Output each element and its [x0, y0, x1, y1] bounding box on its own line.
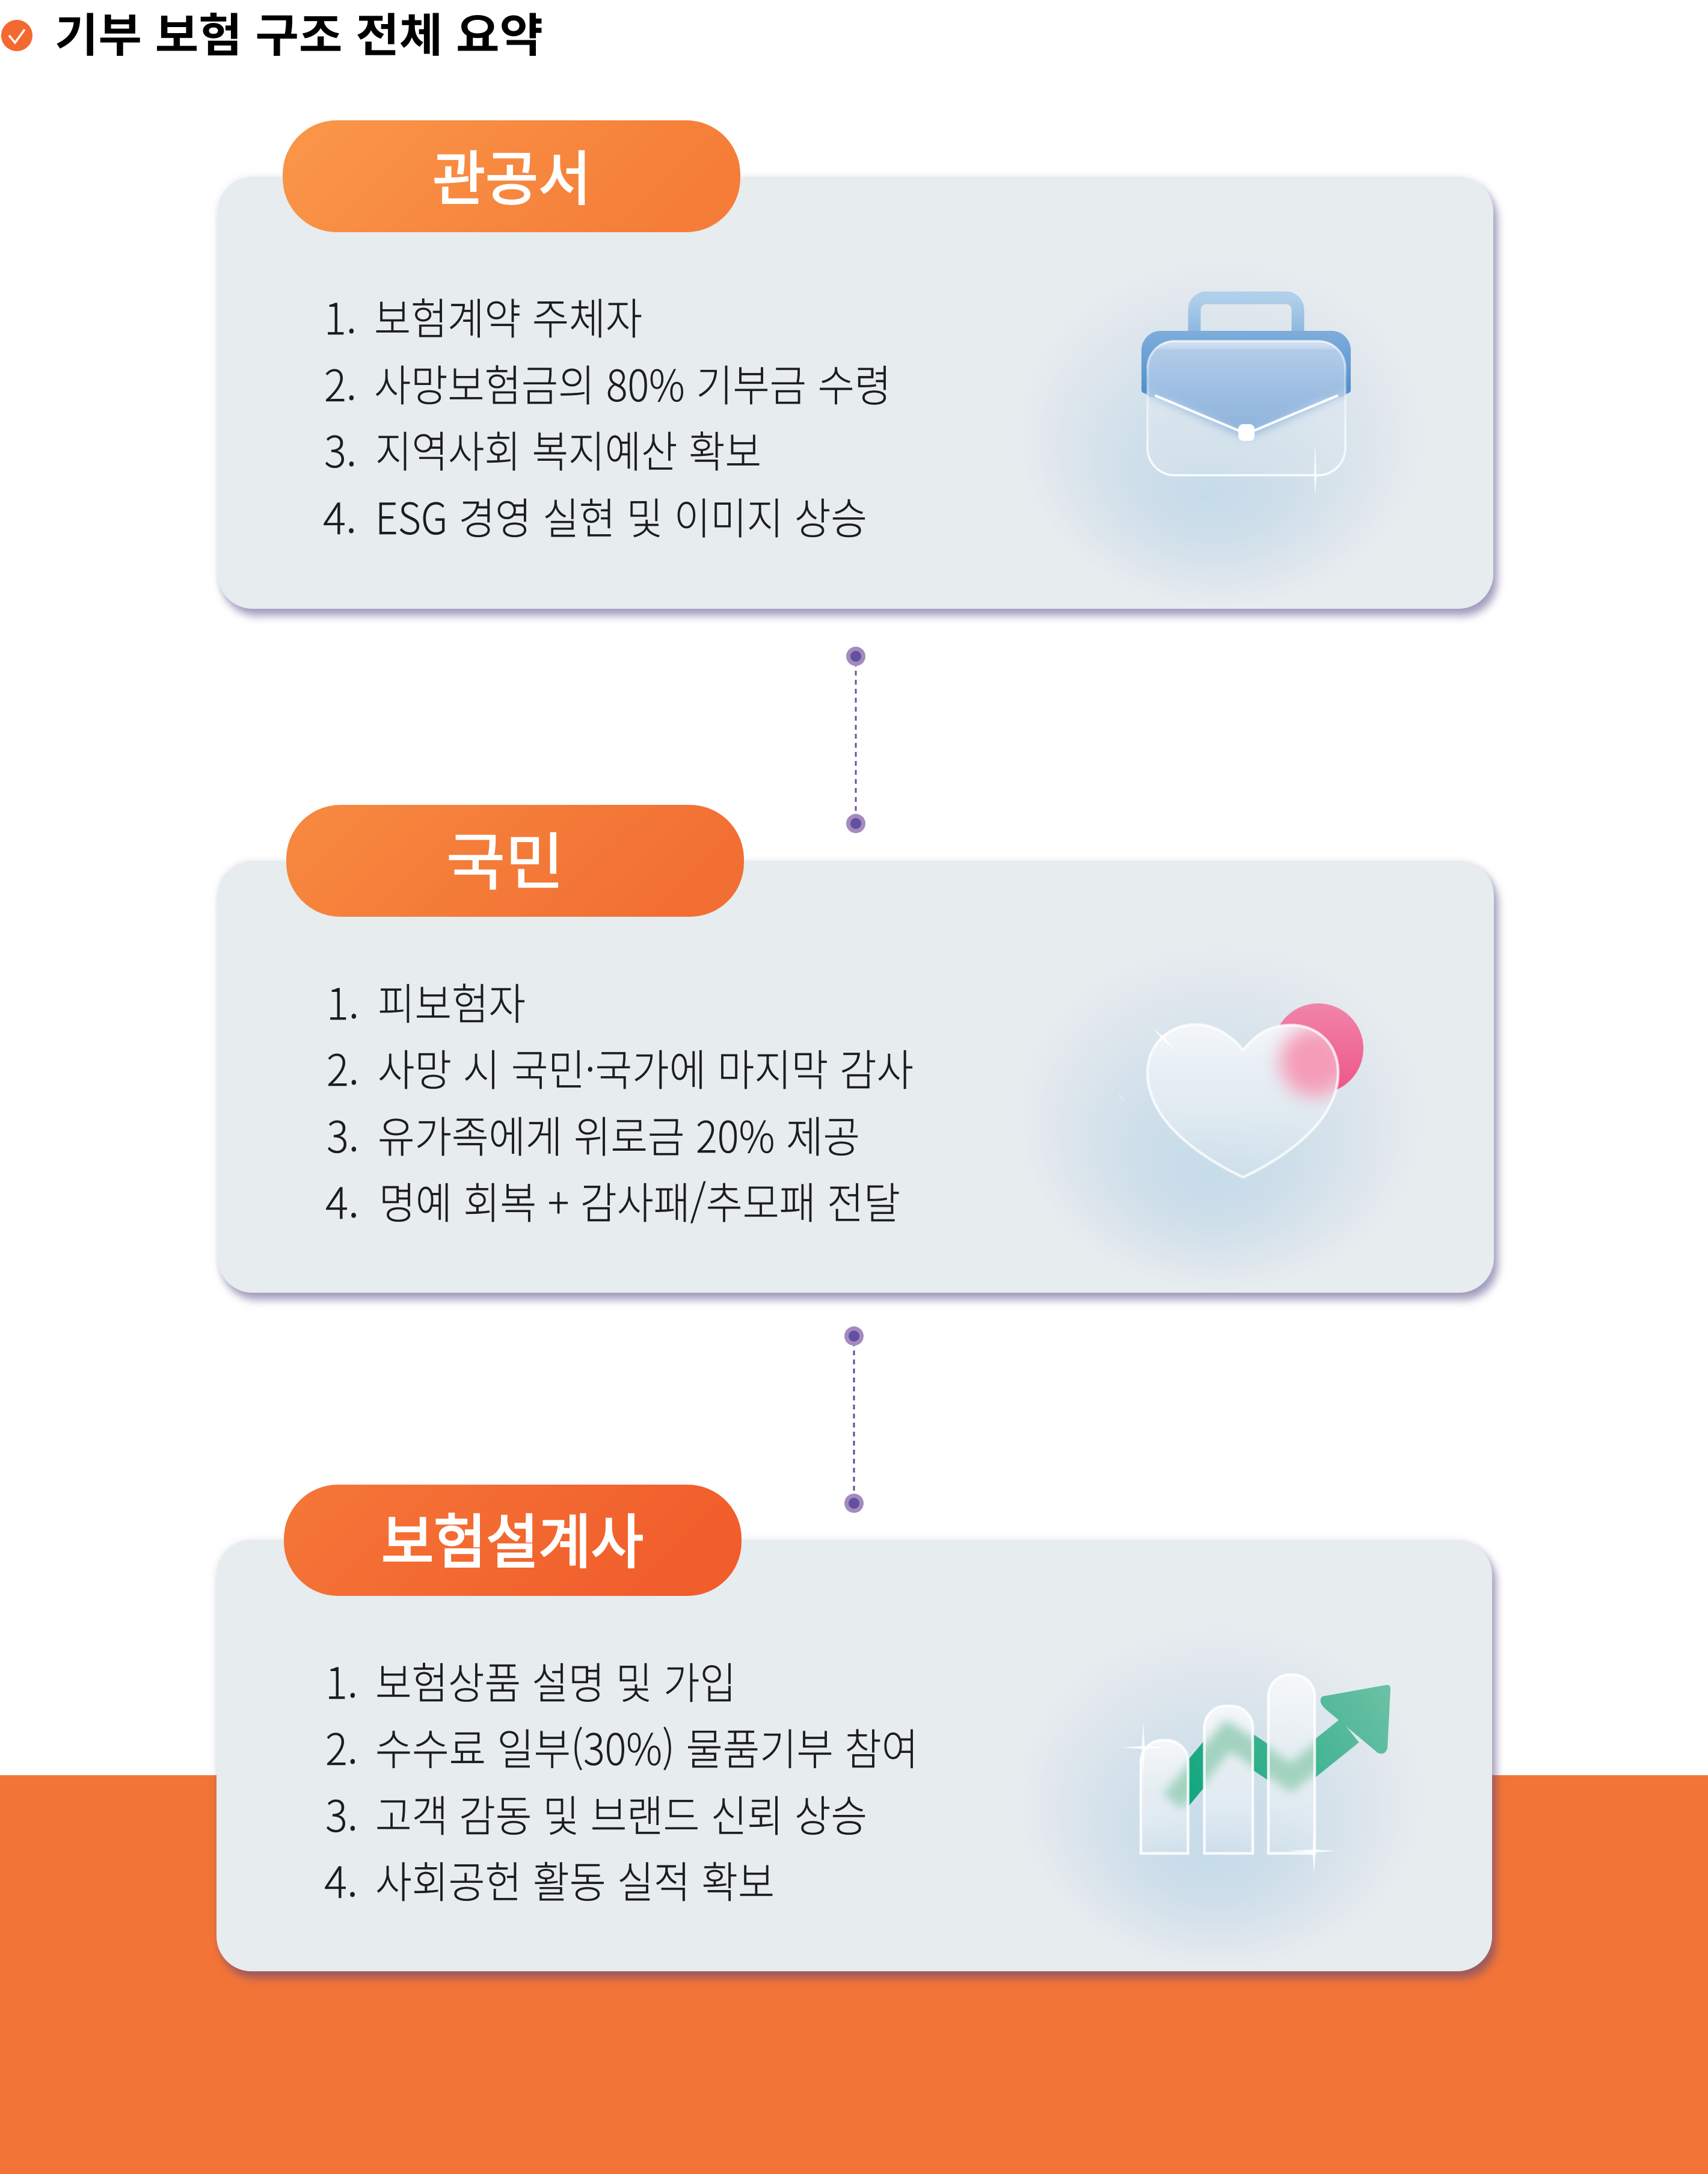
card background — [218, 861, 1494, 1293]
heading pill: 국민 — [286, 805, 744, 917]
list: 보험설계사 roles: 2. — [325, 1714, 358, 1778]
list: 국민 roles: 1. — [327, 969, 359, 1032]
list: 국민 roles: 사망 시 국민·국가에 마지막 감사 — [378, 1035, 914, 1098]
icon: orange check badge — [1, 20, 32, 51]
list: 국민 roles — [325, 969, 914, 1231]
list: 국민 roles: 3. — [327, 1102, 359, 1165]
card background — [217, 1540, 1492, 1971]
list: 관공서 roles: 지역사회 복지예산 확보 — [375, 417, 761, 480]
list: 관공서 roles: 1. — [324, 284, 357, 347]
list: 국민 roles: 유가족에게 위로금 20% 제공 — [378, 1102, 860, 1165]
list: 관공서 roles: ESG 경영 실현 및 이미지 상승 — [375, 484, 867, 547]
icon: glass heart with pink circle — [1057, 993, 1380, 1268]
list: 보험설계사 roles: 보험상품 설명 및 가입 — [375, 1648, 736, 1711]
panel: 관공서 — [218, 120, 1493, 609]
heading pill: 관공서: 관공서 — [432, 146, 591, 212]
orange background band — [0, 1775, 1708, 2174]
card background — [218, 177, 1493, 609]
heading pill: 관공서 — [283, 120, 740, 232]
list: 국민 roles: 명예 회복 + 감사패/추모패 전달 — [379, 1168, 900, 1231]
list: 보험설계사 roles: 3. — [325, 1781, 358, 1844]
icon: glass briefcase — [1057, 291, 1380, 584]
list: 관공서 roles: 보험계약 주체자 — [374, 284, 642, 347]
list: 보험설계사 roles: 4. — [324, 1847, 358, 1911]
list: 보험설계사 roles: 수수료 일부(30%) 물품기부 참여 — [375, 1714, 918, 1778]
panel: 국민 — [218, 805, 1494, 1293]
list: 보험설계사 roles: 1. — [325, 1648, 358, 1711]
list: 국민 roles: 피보험자 — [378, 969, 526, 1032]
connector 1 — [846, 647, 865, 833]
list: 관공서 roles — [323, 284, 891, 547]
title text: 기부 보험 구조 전체 요약 — [55, 10, 543, 62]
list: 국민 roles: 4. — [325, 1168, 359, 1231]
list: 보험설계사 roles — [324, 1648, 918, 1911]
list: 국민 roles: 2. — [327, 1035, 359, 1098]
title row — [1, 10, 543, 62]
list: 관공서 roles: 2. — [324, 351, 357, 414]
heading pill: 보험설계사 — [284, 1485, 742, 1596]
icon: glass bars with rising arrow — [1057, 1673, 1390, 1947]
heading pill: 보험설계사: 보험설계사 — [381, 1509, 644, 1575]
list: 관공서 roles: 3. — [324, 417, 357, 480]
list: 보험설계사 roles: 사회공헌 활동 실적 확보 — [375, 1847, 775, 1911]
list: 관공서 roles: 4. — [323, 484, 357, 547]
list: 보험설계사 roles: 고객 감동 및 브랜드 신뢰 상승 — [375, 1781, 867, 1844]
heading pill: 국민: 국민 — [446, 828, 564, 898]
panel: 보험설계사 — [217, 1485, 1492, 1971]
connector 2 — [844, 1326, 864, 1513]
list: 관공서 roles: 사망보험금의 80% 기부금 수령 — [374, 351, 891, 414]
